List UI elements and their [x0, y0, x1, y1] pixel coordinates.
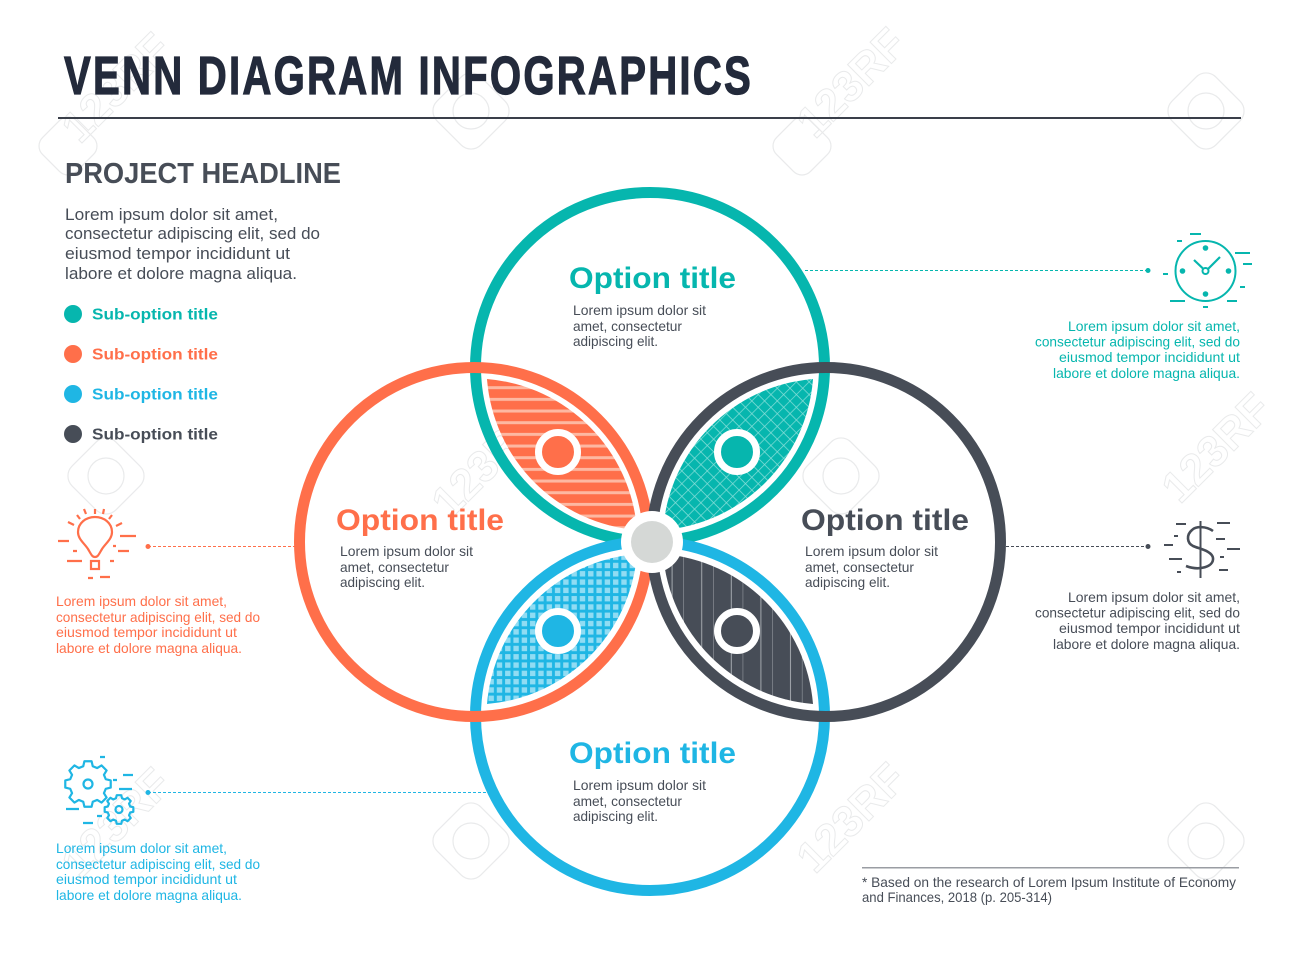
- option: right: Lorem ipsum dolor sit: [805, 543, 938, 559]
- option: bottom: Lorem ipsum dolor sit: [573, 777, 706, 793]
- icon: gears: [65, 757, 133, 824]
- icon: dollar: [1164, 521, 1240, 578]
- watermark: 123RF: [52, 759, 180, 887]
- footnote: and Finances, 2018 (p. 205-314): [862, 889, 1052, 905]
- legend: Sub-option title: [92, 426, 218, 444]
- blue description: Lorem ipsum dolor sit amet,: [56, 840, 227, 856]
- icon: light bulb: [58, 509, 136, 578]
- connector: dollar: [1006, 544, 1150, 549]
- dark description: labore et dolore magna aliqua.: [1053, 636, 1240, 652]
- option: bottom: amet, consectetur: [573, 793, 682, 809]
- orange description: eiusmod tempor incididunt ut: [56, 624, 237, 640]
- option: right: Option title: [801, 504, 969, 537]
- legend: [64, 305, 218, 444]
- intro text: consectetur adipiscing elit, sed do: [65, 225, 320, 243]
- connector: bulb: [146, 544, 295, 549]
- blue description: [56, 840, 260, 903]
- option: top: Lorem ipsum dolor sit: [573, 302, 706, 318]
- option: top: adipiscing elit.: [573, 333, 658, 349]
- option: bottom: adipiscing elit.: [573, 808, 658, 824]
- project headline: PROJECT HEADLINE: [65, 158, 341, 190]
- orange description: labore et dolore magna aliqua.: [56, 640, 242, 656]
- legend: Sub-option title: [92, 306, 218, 324]
- intro text: labore et dolore magna aliqua.: [65, 265, 297, 283]
- option: left: adipiscing elit.: [340, 574, 425, 590]
- watermark: 123RF: [787, 19, 915, 147]
- option: left: amet, consectetur: [340, 559, 449, 575]
- option: bottom: [569, 737, 736, 824]
- overlap: blue: [487, 554, 637, 704]
- icon: clock: [1163, 234, 1252, 307]
- dark description: Lorem ipsum dolor sit amet,: [1068, 589, 1240, 605]
- watermark: 123RF: [1152, 384, 1280, 512]
- legend: Sub-option title: [92, 386, 218, 404]
- teal description: eiusmod tempor incididunt ut: [1059, 349, 1240, 365]
- intro text: Lorem ipsum dolor sit amet,: [65, 206, 278, 224]
- watermark: 123RF: [52, 24, 180, 152]
- option: left: [336, 504, 504, 590]
- orange description: Lorem ipsum dolor sit amet,: [56, 593, 227, 609]
- legend: Sub-option title: [92, 346, 218, 364]
- circle: bottom: [476, 542, 824, 890]
- circle: left: [300, 368, 648, 716]
- option: top: amet, consectetur: [573, 318, 682, 334]
- option: top: [569, 262, 736, 349]
- option: right: [801, 504, 969, 590]
- footnote: * Based on the research of Lorem Ipsum Institute of Economy: [862, 874, 1236, 890]
- blue description: eiusmod tempor incididunt ut: [56, 871, 237, 887]
- connector: clock: [805, 268, 1150, 273]
- panel: project intro: [64, 158, 341, 444]
- overlap: dark: [663, 554, 813, 704]
- dark description: eiusmod tempor incididunt ut: [1059, 620, 1240, 636]
- teal description: consectetur adipiscing elit, sed do: [1035, 334, 1240, 350]
- center node: [621, 511, 683, 573]
- teal description: labore et dolore magna aliqua.: [1053, 365, 1240, 381]
- option: top: Option title: [569, 262, 736, 295]
- title rule: [58, 117, 1241, 119]
- blue description: labore et dolore magna aliqua.: [56, 887, 242, 903]
- circle: right: [652, 368, 1000, 716]
- teal description: Lorem ipsum dolor sit amet,: [1068, 318, 1240, 334]
- blue description: consectetur adipiscing elit, sed do: [56, 856, 260, 872]
- intro text: [65, 206, 320, 283]
- overlap: teal: [663, 379, 813, 530]
- orange description: [56, 593, 260, 656]
- option: bottom: Option title: [569, 737, 736, 770]
- intro text: eiusmod tempor incididunt ut: [65, 245, 290, 263]
- option: left: Option title: [336, 504, 504, 537]
- option: left: Lorem ipsum dolor sit: [340, 543, 473, 559]
- orange description: consectetur adipiscing elit, sed do: [56, 609, 260, 625]
- overlap: orange: [487, 379, 637, 530]
- option: right: adipiscing elit.: [805, 574, 890, 590]
- venn diagram: [300, 192, 1000, 890]
- footnote: [862, 867, 1239, 905]
- connector: gears: [146, 790, 492, 795]
- dark description: consectetur adipiscing elit, sed do: [1035, 604, 1240, 620]
- watermark: 123RF: [422, 399, 550, 527]
- circle: top: [476, 192, 824, 542]
- teal description: [1035, 318, 1240, 381]
- dark description: [1035, 589, 1240, 652]
- watermark: 123RF: [787, 754, 915, 882]
- title: VENN DIAGRAM INFOGRAPHICS: [64, 46, 753, 106]
- option: right: amet, consectetur: [805, 559, 914, 575]
